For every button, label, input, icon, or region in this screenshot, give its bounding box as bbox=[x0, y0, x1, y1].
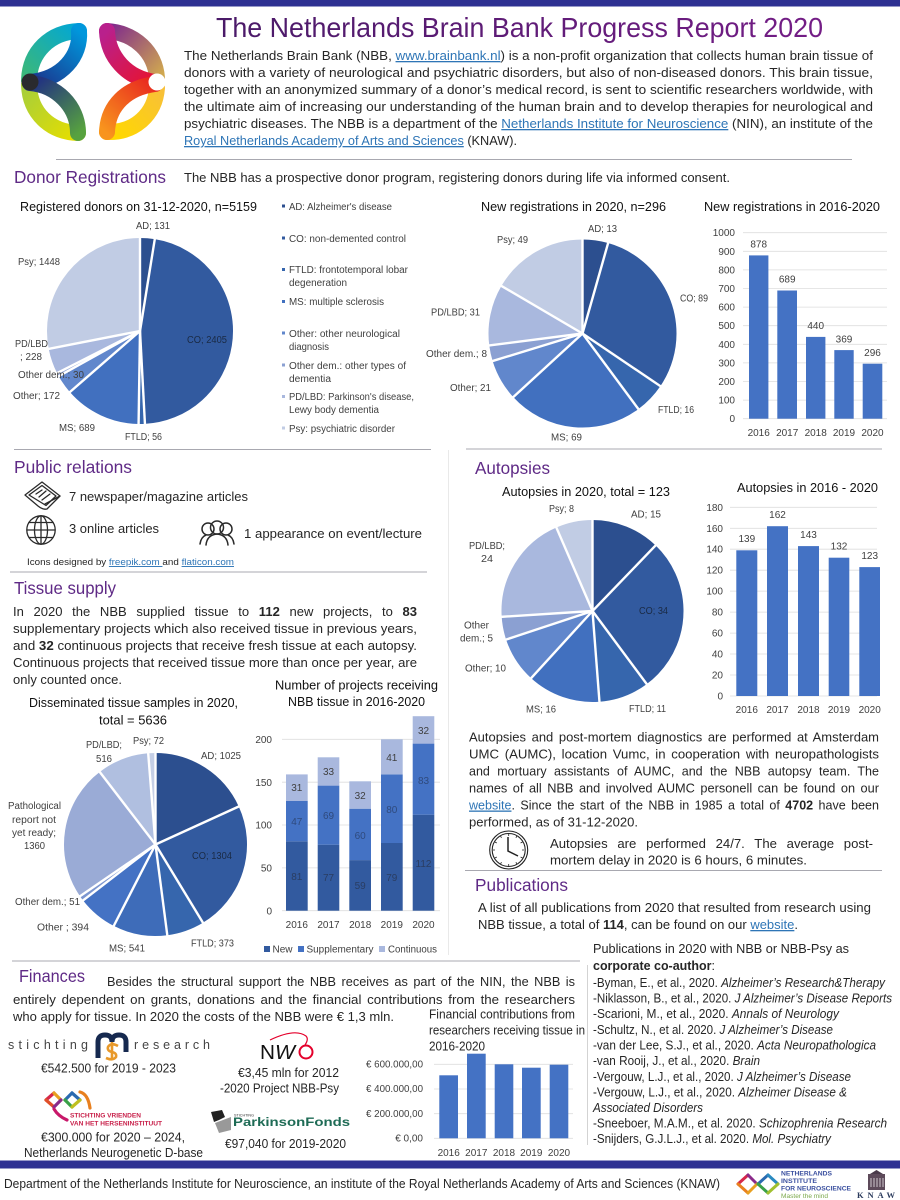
stacked bar chart: projects: 150 bbox=[255, 778, 272, 789]
icon: clock bbox=[490, 831, 528, 869]
stacked bar chart: projects: 80 bbox=[386, 805, 398, 816]
stacked bar chart: projects: 2020 bbox=[412, 920, 435, 931]
bar chart: new registrations 2016-2020: 2020 bbox=[861, 428, 884, 439]
text: post-mortem delay bbox=[550, 836, 873, 868]
bar chart: new registrations 2016-2020: 440 bbox=[807, 321, 824, 332]
intro text block bbox=[184, 48, 873, 148]
chart title: financial contributions: 2016-2020 bbox=[429, 1040, 485, 1054]
pie chart: new registrations 2020: FTLD; 16 bbox=[658, 405, 694, 416]
stacked bar chart: projects bbox=[255, 716, 440, 956]
legend: diagnosis abbreviations: Lewy body dementia bbox=[289, 405, 379, 416]
pie chart: disseminated tissue samples: AD; 1025 bbox=[201, 751, 241, 762]
bar chart: new registrations 2016-2020: 689 bbox=[779, 274, 796, 286]
pie chart: disseminated tissue samples: FTLD; 373 bbox=[191, 938, 234, 950]
bar chart: new registrations 2016-2020: 878 bbox=[750, 240, 767, 250]
pie chart: registered donors: Other; 172 bbox=[13, 391, 60, 402]
bar chart: new registrations 2016-2020: 100 bbox=[718, 396, 735, 407]
bar chart: new registrations 2016-2020: 2018 bbox=[805, 428, 827, 439]
bar chart: autopsies 2016-2020: 132 bbox=[831, 542, 848, 552]
legend: diagnosis abbreviations: PD/LBD: Parkinson's disease, bbox=[289, 392, 414, 403]
bar chart: autopsies 2016-2020: 0 bbox=[717, 692, 723, 702]
logo: Netherlands Institute for Neuroscience bbox=[738, 1170, 852, 1200]
pie chart: registered donors: FTLD; 56 bbox=[125, 432, 162, 443]
legend: diagnosis abbreviations: diagnosis bbox=[289, 342, 329, 353]
pie chart: autopsies 2020 bbox=[460, 504, 668, 716]
bar chart: autopsies 2016-2020: 120 bbox=[706, 566, 723, 577]
legend: diagnosis abbreviations: CO: non-demented control bbox=[289, 234, 406, 245]
pie chart: disseminated tissue samples: Psy; 72 bbox=[133, 736, 164, 747]
logo: Stichting Vrienden van het Herseninstituut: VAN HET HERSENINSTITUUT bbox=[70, 1120, 162, 1128]
bar chart: financial contributions: € 200.000,00 bbox=[366, 1109, 423, 1120]
pie chart: new registrations 2020: CO; 89 bbox=[680, 294, 708, 304]
pie chart: registered donors: PD/LBD bbox=[15, 339, 48, 350]
stacked bar chart: projects: 83 bbox=[418, 776, 429, 787]
icon: newspaper bbox=[25, 482, 60, 509]
bar chart: financial contributions: € 400.000,00 bbox=[366, 1084, 423, 1095]
pie chart: new registrations 2020: PD/LBD; 31 bbox=[431, 308, 480, 318]
chart title: number of projects: Number of projects receiving bbox=[275, 678, 438, 692]
chart title: new registrations 2020: New registrations in 2020, n=296 bbox=[481, 200, 666, 214]
logo: NWO bbox=[260, 1033, 312, 1064]
logo: ParkinsonFonds: ParkinsonFonds bbox=[233, 1115, 350, 1129]
chart title: disseminated tissue samples: Disseminated tissue samples in 2020, bbox=[29, 696, 238, 710]
text: corporate co-author list: -Schultz, N., et al. 2020. J Alzheimer’s Disease bbox=[593, 1022, 833, 1037]
text: corporate co-author list: -van der Lee, S.J., et al., 2020. Acta Neuropathologica bbox=[593, 1038, 876, 1052]
bar chart: autopsies 2016-2020: 162 bbox=[769, 510, 786, 521]
bar chart: autopsies 2016-2020: 123 bbox=[861, 551, 878, 562]
legend: diagnosis abbreviations: FTLD: frontotemporal lobar bbox=[289, 265, 409, 276]
bar chart: new registrations 2016-2020: 2017 bbox=[776, 428, 799, 439]
intro text block: donors with a variety of neurological and psychiatric disorders, but also of non-diseased donors. This brain tissue, bbox=[184, 65, 873, 80]
pie chart: autopsies 2020: PD/LBD; bbox=[469, 541, 505, 552]
stacked bar chart: projects: 47 bbox=[291, 817, 303, 828]
text: NWO amount: €3,45 mln for 2012 bbox=[238, 1065, 339, 1080]
stacked bar chart: projects: 0 bbox=[266, 906, 272, 917]
text: finances paragraph: entirely dependent on grants, donations and the financial contributions from the researchers bbox=[13, 992, 575, 1007]
pie chart: disseminated tissue samples: report not bbox=[12, 815, 56, 826]
bar chart: financial contributions: 2020 bbox=[548, 1148, 571, 1159]
logo: Netherlands Institute for Neuroscience: INSTITUTE bbox=[781, 1178, 818, 1185]
bar chart: financial contributions: 2016 bbox=[438, 1148, 460, 1159]
logo: NWO: W bbox=[275, 1042, 297, 1064]
pie chart: disseminated tissue samples: 516 bbox=[96, 754, 112, 765]
text: Vrienden amount: Netherlands Neurogenetic D-base bbox=[24, 1145, 203, 1160]
pie chart: registered donors: Psy; 1448 bbox=[18, 257, 60, 268]
pie chart: disseminated tissue samples: MS; 541 bbox=[109, 944, 145, 954]
bar chart: new registrations 2016-2020: 296 bbox=[864, 348, 881, 359]
text: tissue supply paragraph bbox=[13, 604, 417, 687]
text: NWO amount bbox=[220, 1065, 339, 1096]
text: autopsies paragraph: and mortuary assistants of AUMC, and the NBB autopsy team. The bbox=[469, 764, 879, 778]
logo: KNAW bbox=[857, 1170, 896, 1200]
text: appearance on event: 1 appearance on event/lecture bbox=[244, 526, 422, 541]
pie chart: autopsies 2020: CO; 34 bbox=[639, 606, 668, 617]
bar chart: autopsies 2016-2020: 2018 bbox=[797, 705, 820, 716]
bar chart: new registrations 2016-2020: 600 bbox=[718, 303, 735, 314]
pie chart: new registrations 2020: Other; 21 bbox=[450, 383, 491, 394]
icon: people bbox=[200, 521, 234, 545]
legend: diagnosis abbreviations: MS: multiple sclerosis bbox=[289, 297, 384, 308]
text: autopsies paragraph: website. Since the start of the NBB in 1985 a total of 4702 have been bbox=[468, 798, 879, 812]
stacked bar chart: projects: 69 bbox=[323, 811, 334, 822]
chart title: number of projects bbox=[275, 678, 438, 709]
text: publications summary: A list of all publications from 2020 that resulted from research using bbox=[478, 900, 871, 915]
stacked bar chart: projects: 2016 bbox=[286, 920, 308, 931]
text: ParkinsonFonds amount: €97,040 for 2019-2020 bbox=[225, 1136, 346, 1151]
logo: Netherlands Brain Bank bbox=[22, 31, 166, 133]
legend: diagnosis abbreviations bbox=[282, 202, 414, 435]
text: corporate co-author list: -Vergouw, L.J., et al., 2020. Alzheimer Disease & bbox=[593, 1084, 847, 1100]
text: corporate co-author list: -Scarioni, M., et al., 2020. Annals of Neurology bbox=[593, 1006, 840, 1021]
pie chart: autopsies 2020: 24 bbox=[481, 554, 493, 565]
stacked bar chart: projects: 32 bbox=[418, 726, 429, 737]
stacked bar chart: projects: 77 bbox=[323, 873, 334, 884]
pie chart: disseminated tissue samples: yet ready; bbox=[12, 828, 56, 839]
pie chart: disseminated tissue samples: Other dem.; 51 bbox=[15, 897, 80, 908]
stacked bar chart: projects: Supplementary bbox=[306, 944, 374, 956]
text: tissue supply paragraph: In 2020 the NBB supplied tissue to 112 new projects, to 83 bbox=[13, 604, 417, 619]
chart title: new registrations 2016-2020: New registrations in 2016-2020 bbox=[704, 200, 880, 214]
pie chart: disseminated tissue samples: Pathological bbox=[8, 801, 61, 812]
heading: Finances: Finances bbox=[19, 966, 85, 986]
stacked bar chart: projects: 41 bbox=[386, 753, 398, 764]
text: corporate co-author list: corporate co-author: bbox=[593, 958, 715, 973]
chart title: autopsies 2020: Autopsies in 2020, total = 123 bbox=[502, 485, 670, 499]
icon: globe bbox=[27, 516, 55, 544]
legend: diagnosis abbreviations: dementia bbox=[289, 374, 331, 385]
legend: diagnosis abbreviations: AD: Alzheimer's disease bbox=[289, 202, 392, 213]
legend: diagnosis abbreviations: Other dem.: other types of bbox=[289, 361, 406, 372]
text: corporate co-author list: Publications in 2020 with NBB or NBB-Psy as bbox=[593, 941, 849, 956]
stacked bar chart: projects: 81 bbox=[291, 872, 303, 883]
text: corporate co-author list: -Snijders, G.J.L.J., et al. 2020. Mol. Psychiatry bbox=[593, 1131, 832, 1146]
text: finances paragraph bbox=[12, 974, 575, 1024]
chart title: number of projects: NBB tissue in 2016-2020 bbox=[288, 695, 425, 709]
stacked bar chart: projects: 31 bbox=[291, 783, 303, 794]
bar chart: financial contributions: € 0,00 bbox=[395, 1134, 423, 1144]
bar chart: new registrations 2016-2020: 800 bbox=[718, 265, 735, 276]
bar chart: autopsies 2016-2020: 160 bbox=[706, 524, 723, 535]
bar chart: autopsies 2016-2020: 60 bbox=[712, 629, 723, 640]
stacked bar chart: projects: 2019 bbox=[381, 920, 403, 931]
text: tissue supply paragraph: supplementary projects which also received tissue in previous years, bbox=[13, 621, 417, 636]
stacked bar chart: projects: 200 bbox=[255, 735, 272, 746]
stacked bar chart: projects: New bbox=[272, 944, 293, 956]
pie chart: disseminated tissue samples bbox=[8, 736, 241, 954]
bar chart: autopsies 2016-2020: 2019 bbox=[828, 705, 851, 716]
text: autopsies paragraph: names of all NBB and involved AUMC personell can be found on our bbox=[469, 780, 880, 796]
heading: Publications: Publications bbox=[475, 875, 568, 895]
text: post-mortem delay: mortem delay in 2020 is 6 hours, 6 minutes. bbox=[550, 852, 807, 868]
stacked bar chart: projects: 33 bbox=[323, 767, 334, 778]
pie chart: disseminated tissue samples: Other ; 394 bbox=[37, 922, 89, 934]
pie chart: new registrations 2020: Other dem.; 8 bbox=[426, 349, 487, 360]
top banner bbox=[0, 0, 900, 6]
text: autopsies paragraph bbox=[468, 730, 880, 830]
pie chart: autopsies 2020: Other; 10 bbox=[465, 664, 506, 674]
bar chart: autopsies 2016-2020: 139 bbox=[738, 534, 756, 545]
pie chart: new registrations 2020: Psy; 49 bbox=[497, 235, 528, 246]
logo: Netherlands Institute for Neuroscience: FOR NEUROSCIENCE bbox=[781, 1186, 852, 1192]
pie chart: registered donors: CO; 2405 bbox=[187, 335, 227, 346]
bar chart: new registrations 2016-2020: 700 bbox=[718, 284, 735, 295]
bar chart: autopsies 2016-2020: 40 bbox=[712, 650, 723, 660]
legend: diagnosis abbreviations: Other: other neurological bbox=[289, 329, 400, 340]
chart title: registered donors: Registered donors on 31-12-2020, n=5159 bbox=[20, 200, 257, 214]
intro text block: the ultimate aim of increasing our understanding of the human brain and to develop therapies for neurological and bbox=[184, 99, 873, 114]
stacked bar chart: projects: Continuous bbox=[388, 944, 437, 956]
text: tissue supply paragraph: and 32 continuous projects that receive fresh tissue at each autopsy. bbox=[13, 638, 417, 653]
bar chart: financial contributions: 2018 bbox=[493, 1148, 516, 1159]
chart title: financial contributions: Financial contributions from bbox=[429, 1008, 575, 1022]
pie chart: autopsies 2020: Psy; 8 bbox=[549, 504, 574, 515]
bar chart: new registrations 2016-2020: 500 bbox=[718, 321, 735, 332]
logo: Netherlands Institute for Neuroscience: Master the mind bbox=[781, 1193, 828, 1200]
bar chart: autopsies 2016-2020: 180 bbox=[706, 503, 723, 514]
chart title: autopsies 2016-2020: Autopsies in 2016 - 2020 bbox=[737, 481, 878, 495]
pie chart: registered donors: ; 228 bbox=[20, 352, 42, 363]
pie chart: registered donors bbox=[13, 221, 227, 443]
text: tissue supply paragraph: Continuous projects that received tissue more than once per year, are bbox=[13, 655, 417, 670]
logo: stichting MS research: research bbox=[134, 1038, 210, 1052]
text: icon credits: Icons designed by freepik.com and flaticon.com bbox=[27, 557, 234, 568]
text: corporate co-author list: Associated Disorders bbox=[592, 1100, 703, 1115]
chart title: financial contributions: researchers receiving tissue in bbox=[429, 1024, 585, 1038]
logo: stichting MS research bbox=[8, 1035, 210, 1060]
stacked bar chart: projects: 79 bbox=[386, 873, 398, 884]
bar chart: new registrations 2016-2020: 400 bbox=[718, 340, 735, 351]
bar chart: financial contributions: € 600.000,00 bbox=[366, 1060, 423, 1070]
heading: Public relations: Public relations bbox=[14, 457, 132, 477]
chart title: disseminated tissue samples bbox=[29, 696, 238, 728]
text: Vrienden amount: €300.000 for 2020 – 2024, bbox=[41, 1130, 185, 1144]
pie chart: disseminated tissue samples: PD/LBD; bbox=[86, 740, 122, 751]
bar chart: new registrations 2016-2020: 369 bbox=[836, 334, 853, 346]
intro text block: together with an anonymized summary of a donor’s medical record, is sent to scientific researchers worldwide, with bbox=[184, 82, 873, 97]
pie chart: registered donors: Other dem.; 30 bbox=[18, 370, 84, 381]
bar chart: autopsies 2016-2020: 2017 bbox=[766, 705, 789, 716]
text: online articles: 3 online articles bbox=[69, 521, 159, 536]
heading: Tissue supply: Tissue supply bbox=[14, 578, 116, 598]
heading: Autopsies: Autopsies bbox=[475, 458, 550, 478]
bar chart: financial contributions bbox=[366, 1054, 573, 1159]
pie chart: autopsies 2020: FTLD; 11 bbox=[629, 704, 666, 715]
bar chart: new registrations 2016-2020: 0 bbox=[729, 414, 735, 425]
bar chart: autopsies 2016-2020: 2020 bbox=[859, 705, 881, 716]
stacked bar chart: projects: 50 bbox=[261, 864, 272, 874]
bar chart: autopsies 2016-2020: 140 bbox=[706, 545, 723, 556]
logo: KNAW: KNAW bbox=[857, 1190, 896, 1200]
text: MS research amount: €542.500 for 2019 - 2023 bbox=[41, 1060, 176, 1076]
text: autopsies paragraph: UMC (AUMC), location Vumc, in cooperation with neuropathologists bbox=[469, 746, 880, 762]
text: tissue supply paragraph: only counted once. bbox=[13, 672, 122, 687]
chart title: disseminated tissue samples: total = 5636 bbox=[99, 714, 167, 728]
logo: Stichting Vrienden van het Herseninstituut: STICHTING VRIENDEN bbox=[70, 1112, 141, 1120]
bar chart: autopsies 2016-2020: 20 bbox=[712, 670, 723, 682]
legend: diagnosis abbreviations: degeneration bbox=[289, 278, 347, 289]
text: autopsies paragraph: performed, as of 31-12-2020. bbox=[469, 814, 638, 830]
logo: ParkinsonFonds: STICHTING bbox=[234, 1114, 254, 1118]
pie chart: new registrations 2020: AD; 13 bbox=[588, 224, 617, 235]
text: post-mortem delay: Autopsies are performed 24/7. The average post- bbox=[550, 836, 873, 851]
bar chart: autopsies 2016-2020 bbox=[706, 503, 881, 716]
stacked bar chart: projects: 2017 bbox=[317, 920, 340, 931]
text: newspaper articles: 7 newspaper/magazine articles bbox=[69, 489, 248, 504]
text: prospective donor program: The NBB has a prospective donor program, registering donors during life via informed consent. bbox=[184, 170, 730, 185]
intro text block: The Netherlands Brain Bank (NBB, www.brainbank.nl) is a non-profit organization that collects human brain tissue of bbox=[184, 48, 873, 63]
logo: NWO: N bbox=[260, 1042, 275, 1064]
logo: ParkinsonFonds bbox=[211, 1110, 350, 1133]
legend: diagnosis abbreviations: Psy: psychiatric disorder bbox=[289, 424, 396, 435]
intro text block: Royal Netherlands Academy of Arts and Sciences (KNAW). bbox=[184, 133, 517, 148]
pie chart: autopsies 2020: Other bbox=[464, 620, 490, 632]
pie chart: new registrations 2020 bbox=[426, 224, 708, 444]
pie chart: disseminated tissue samples: CO; 1304 bbox=[192, 851, 232, 862]
bar chart: financial contributions: 2017 bbox=[465, 1148, 488, 1159]
bar chart: new registrations 2016-2020: 2019 bbox=[833, 428, 856, 439]
bottom banner bbox=[0, 1160, 900, 1168]
text: corporate co-author list: -Byman, E., et al., 2020. Alzheimer’s Research&Therapy bbox=[593, 975, 886, 990]
stacked bar chart: projects: 2018 bbox=[349, 920, 372, 931]
bar chart: new registrations 2016-2020: 200 bbox=[718, 377, 735, 388]
text: finances paragraph: Besides the structural support the NBB receives as part of the NIN, the NBB is bbox=[107, 974, 575, 989]
bar chart: new registrations 2016-2020: 1000 bbox=[713, 228, 735, 239]
text: Vrienden amount bbox=[24, 1130, 203, 1160]
text: publications summary: NBB tissue, a total of 114, can be found on our website. bbox=[478, 917, 798, 932]
bar chart: autopsies 2016-2020: 80 bbox=[712, 608, 723, 619]
text: corporate co-author list: -van Rooij, J., et al., 2020. Brain bbox=[593, 1053, 760, 1068]
chart title: financial contributions bbox=[429, 1008, 585, 1054]
title: The Netherlands Brain Bank Progress Report 2020 bbox=[216, 12, 823, 43]
bar chart: autopsies 2016-2020: 143 bbox=[800, 530, 817, 541]
logo: Stichting Vrienden van het Herseninstituut bbox=[46, 1092, 162, 1128]
text: finances paragraph: who apply for tissue. In 2020 the costs of the NBB were € 1,3 mln. bbox=[12, 1009, 394, 1024]
stacked bar chart: projects: 112 bbox=[416, 859, 432, 870]
bar chart: new registrations 2016-2020 bbox=[713, 228, 887, 439]
heading: Donor Registrations: Donor Registrations bbox=[14, 167, 166, 187]
footer text: Department of the Netherlands Institute for Neuroscience, an institute of the Royal Netherlands Academy of Arts and Sciences (KNAW) bbox=[4, 1176, 720, 1191]
pie chart: disseminated tissue samples: 1360 bbox=[24, 841, 45, 852]
intro text block: psychiatric diseases. The NBB is a department of the Netherlands Institute for Neuroscience (NIN), an institute of the bbox=[184, 116, 873, 131]
text: NWO amount: -2020 Project NBB-Psy bbox=[220, 1080, 339, 1096]
text: corporate co-author list: -Sneeboer, M.A.M., et al. 2020. Schizophrenia Research bbox=[593, 1116, 887, 1130]
pie chart: registered donors: MS; 689 bbox=[59, 423, 95, 434]
bar chart: financial contributions: 2019 bbox=[520, 1148, 543, 1159]
pie chart: autopsies 2020: AD; 15 bbox=[631, 510, 661, 520]
pie chart: registered donors: AD; 131 bbox=[136, 221, 170, 232]
bar chart: new registrations 2016-2020: 300 bbox=[718, 358, 735, 369]
pie chart: autopsies 2020: dem.; 5 bbox=[460, 634, 493, 644]
text: publications summary bbox=[478, 900, 871, 932]
stacked bar chart: projects: 59 bbox=[355, 881, 366, 892]
stacked bar chart: projects: 32 bbox=[355, 791, 366, 802]
bar chart: autopsies 2016-2020: 100 bbox=[706, 587, 723, 598]
bar chart: autopsies 2016-2020: 2016 bbox=[736, 705, 758, 716]
logo: Netherlands Institute for Neuroscience: NETHERLANDS bbox=[781, 1170, 833, 1178]
logo: stichting MS research: stichting bbox=[8, 1038, 88, 1052]
pie chart: new registrations 2020: MS; 69 bbox=[551, 432, 582, 444]
bar chart: new registrations 2016-2020: 900 bbox=[718, 247, 735, 258]
text: corporate co-author list bbox=[592, 941, 892, 1146]
bar chart: new registrations 2016-2020: 2016 bbox=[748, 428, 770, 439]
text: corporate co-author list: -Vergouw, L.J., et al., 2020. J Alzheimer’s Disease bbox=[593, 1069, 851, 1084]
text: autopsies paragraph: Autopsies and post-mortem diagnostics are performed at Amsterdam bbox=[469, 730, 879, 744]
pie chart: autopsies 2020: MS; 16 bbox=[526, 704, 556, 716]
stacked bar chart: projects: 100 bbox=[255, 821, 272, 832]
stacked bar chart: projects: 60 bbox=[355, 831, 366, 842]
